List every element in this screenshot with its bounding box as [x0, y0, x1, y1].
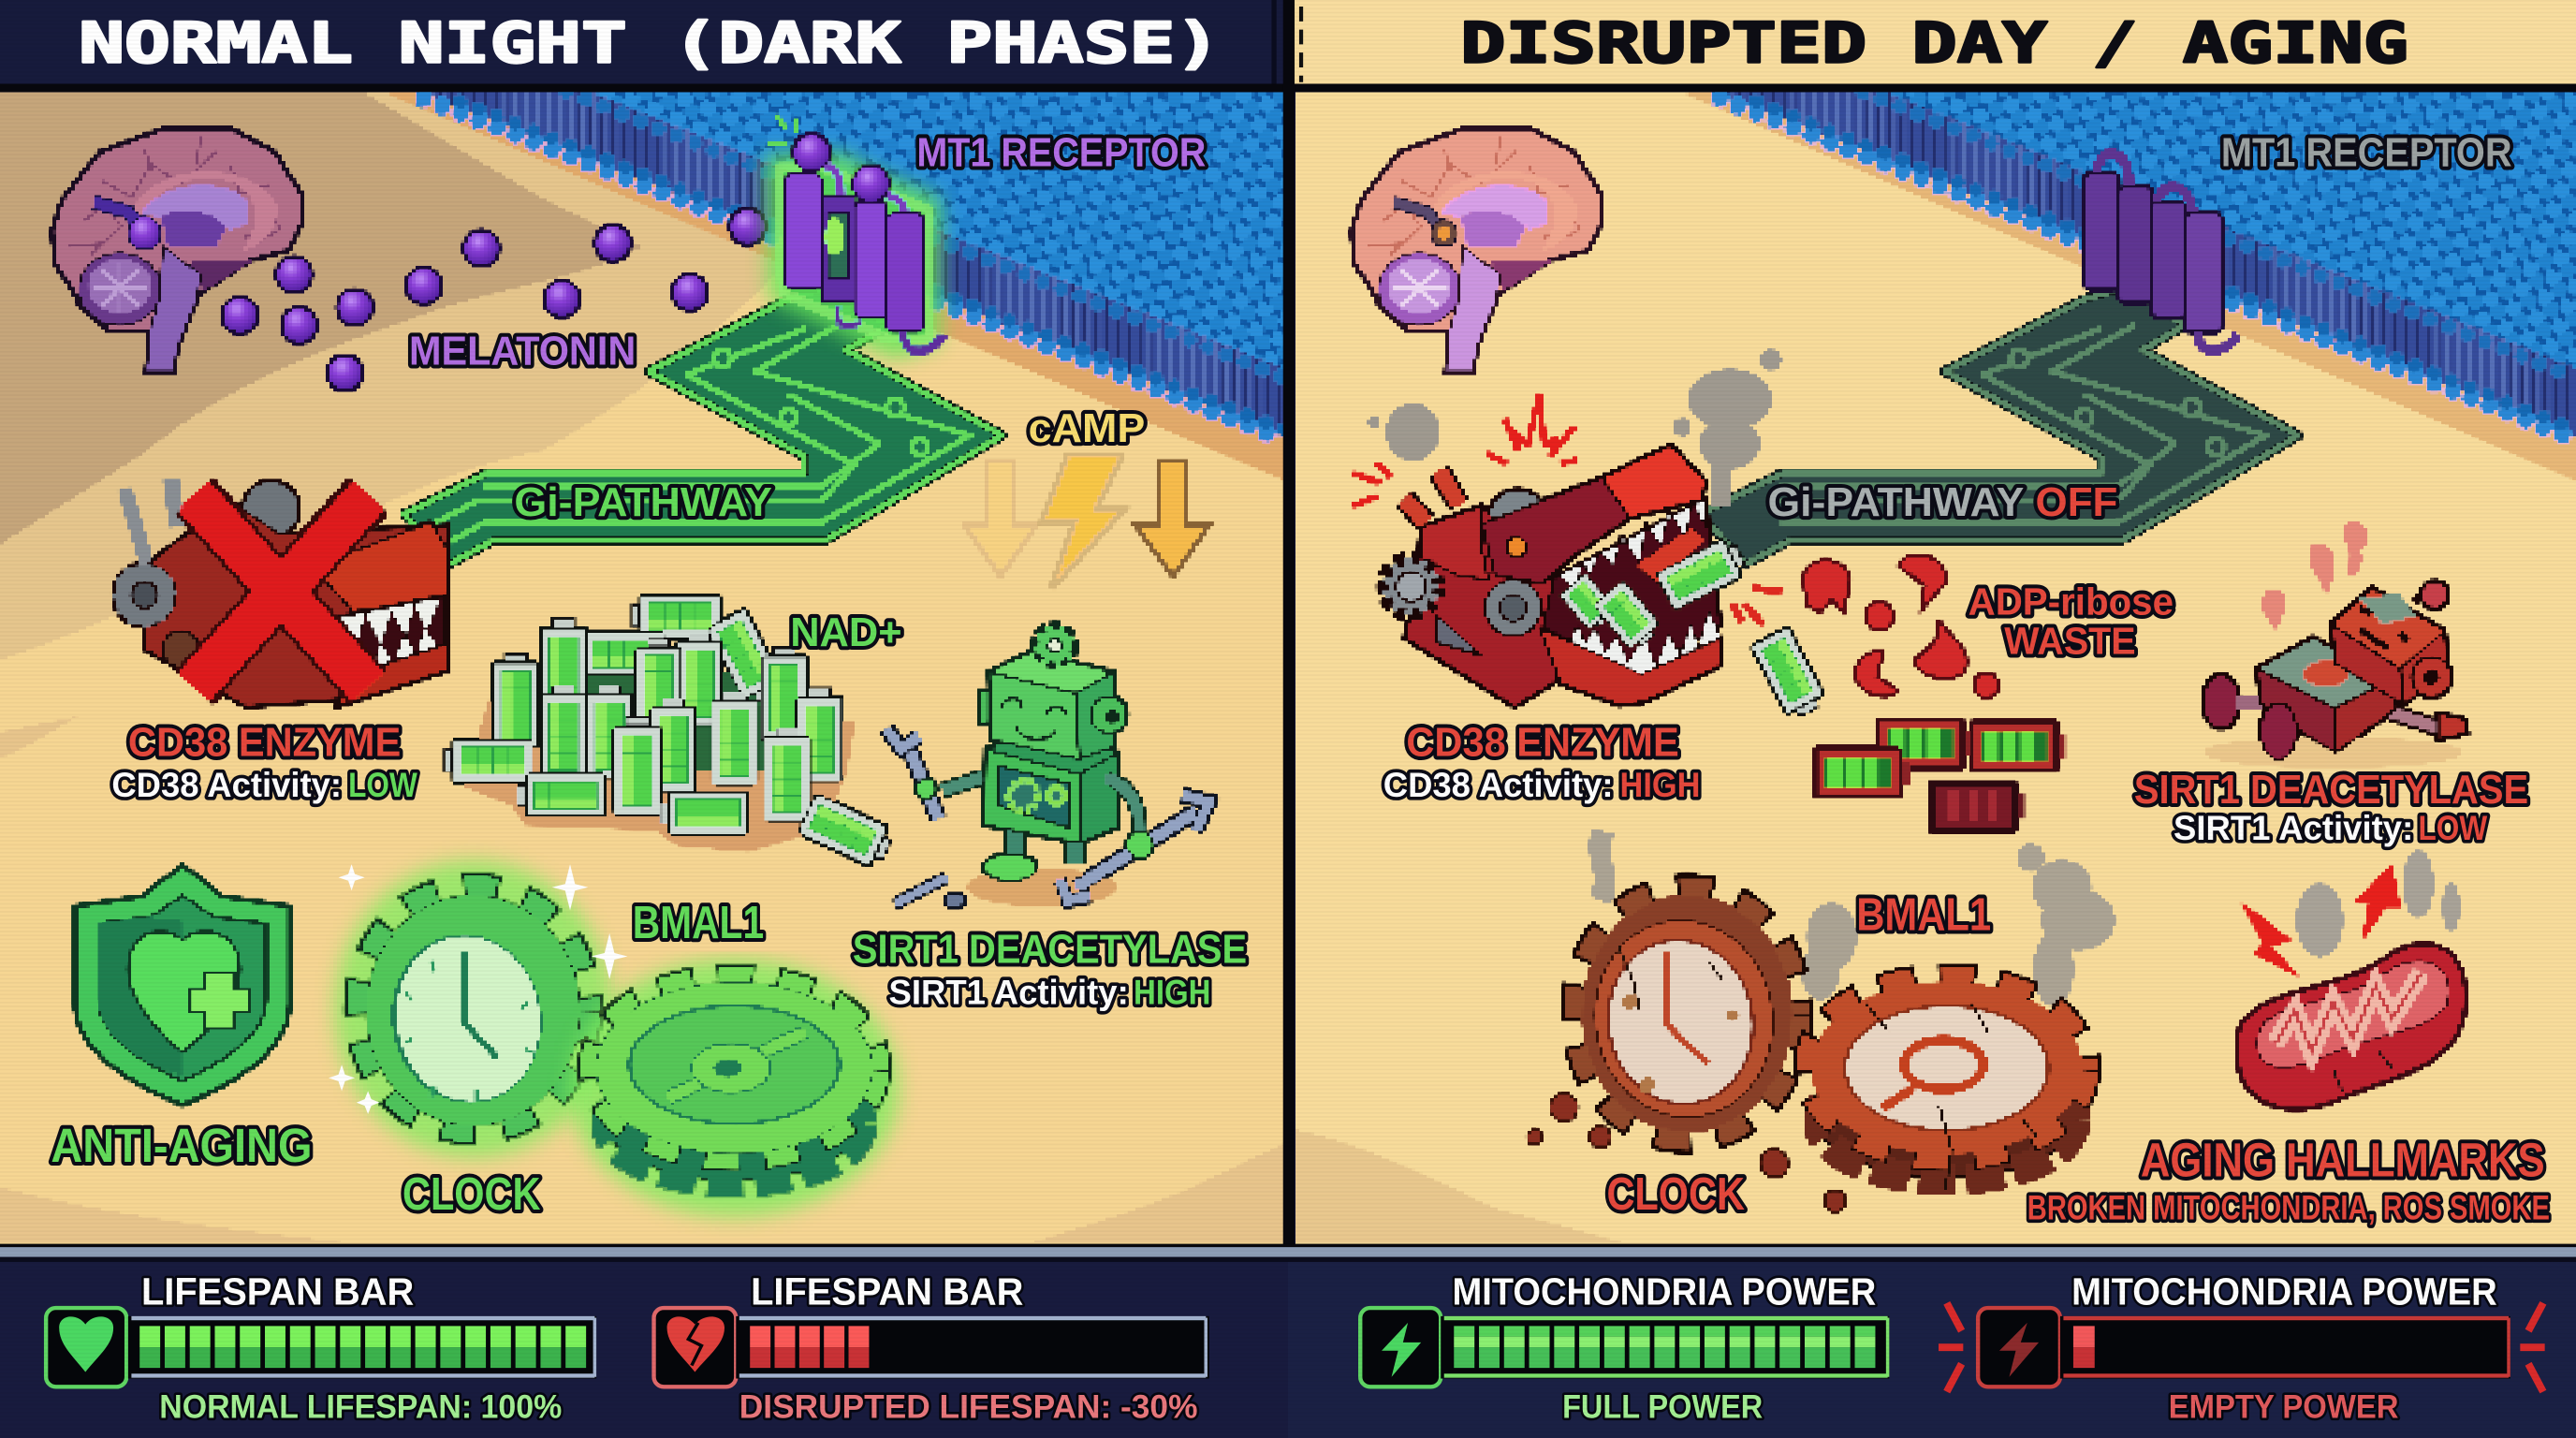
icon: ADP-ribose waste blobs — [1804, 555, 1998, 697]
membrane right — [1682, 92, 2576, 479]
label: ADP-ribose waste — [1969, 580, 2174, 663]
label: Gi-pathway: Gi-PATHWAY — [514, 479, 772, 525]
label: anti-aging: ANTI-AGING — [51, 1119, 312, 1172]
label: melatonin: MELATONIN — [409, 329, 636, 374]
icon: CD38 machine active — [1383, 446, 1749, 707]
icon: happy robot SIRT1 — [887, 626, 1209, 907]
icon: rusty BMAL1 gear — [1808, 979, 2085, 1191]
label: Gi-pathway off: OFF — [2036, 479, 2117, 525]
chart: Gi pathway circuit off — [1701, 287, 2298, 564]
label: SIRT1 activity low: LOW — [2419, 809, 2487, 847]
icon: NAD+ battery pile — [446, 594, 896, 871]
label: CD38 activity high: CD38 Activity: — [1383, 766, 1614, 804]
label: empty power: EMPTY POWER — [2169, 1389, 2398, 1426]
label: SIRT1 activity low: SIRT1 Activity: — [2174, 809, 2413, 847]
membrane left — [386, 92, 1284, 479]
label: CD38 enzyme: CD38 ENZYME — [128, 719, 401, 765]
label: NAD+: NAD+ — [790, 609, 902, 655]
title: disrupted day: DISRUPTED DAY / AGING — [1460, 12, 2408, 77]
icon: glowing clock gear — [335, 861, 611, 1157]
center divider — [1283, 0, 1295, 1249]
icon: red lightning bolts — [2241, 866, 2400, 976]
label: MT1 receptor: MT1 RECEPTOR — [916, 129, 1206, 175]
panel: disrupted day background — [1295, 92, 2576, 1245]
title: normal night: NORMAL NIGHT (DARK PHASE) — [79, 12, 1221, 77]
label: MT1 receptor grey: MT1 RECEPTOR — [2221, 129, 2512, 175]
left wrench and arm — [887, 729, 983, 818]
label: Gi-pathway off: Gi-PATHWAY — [1767, 479, 2024, 525]
icon: smoke over mitochondrion — [2297, 851, 2459, 956]
icon: rust debris — [1528, 1094, 1845, 1211]
icon: CD38 machine inhibited — [113, 479, 448, 707]
icon: rusty clock gear — [1579, 892, 1795, 1136]
label: BMAL1 normal: BMAL1 — [633, 898, 764, 948]
icon: sparkles — [329, 864, 627, 1114]
chart: empty power bar — [2060, 1316, 2510, 1379]
hammer — [896, 877, 964, 907]
right wrench — [1060, 795, 1209, 901]
label: ADP-ribose waste: ADP-ribose — [1969, 580, 2174, 623]
panel: normal night background — [0, 92, 1284, 1245]
icon: red X — [194, 496, 368, 687]
chart: disrupted lifespan bar 5 segments — [736, 1316, 1209, 1379]
panel: bottom status bar — [0, 1244, 2576, 1438]
label: CD38 enzyme high: CD38 ENZYME — [1406, 719, 1679, 765]
icon: cAMP down arrows and bolt — [966, 455, 1208, 588]
label: mitochondria power empty: MITOCHONDRIA POWER — [2071, 1270, 2497, 1313]
icon: depleted batteries — [1814, 718, 2065, 833]
icon: glowing BMAL1 gear — [570, 960, 899, 1216]
icon: MT1 receptor inactive — [2085, 154, 2237, 351]
label: SIRT1 activity high: HIGH — [1134, 973, 1211, 1011]
label: CD38 activity high: HIGH — [1620, 766, 1701, 804]
label: lifespan bar disrupted: LIFESPAN BAR — [751, 1270, 1023, 1313]
label: SIRT1 activity high: SIRT1 Activity: — [889, 973, 1129, 1011]
icon: gear smoke — [1589, 829, 2115, 1005]
icon: red bolt frame — [1978, 1308, 2060, 1387]
header: disrupted day — [1288, 0, 2576, 92]
icon: MT1 receptor active — [768, 115, 943, 351]
icon: brain disrupted — [1352, 130, 1602, 372]
icon: green heart frame — [46, 1308, 126, 1387]
icon: broken heart frame — [654, 1308, 736, 1387]
label: ADP-ribose waste: WASTE — [2004, 620, 2136, 663]
label: disrupted lifespan -30%: DISRUPTED LIFESPAN: -30% — [739, 1389, 1197, 1426]
chart: normal lifespan bar 18 segments — [128, 1316, 596, 1379]
label: cAMP: cAMP — [1029, 405, 1145, 451]
chart: full power bar — [1441, 1316, 1889, 1379]
label: BMAL1 disrupted: BMAL1 — [1856, 889, 1991, 940]
chart: Gi pathway circuit normal — [404, 287, 1003, 564]
icon: green bolt frame — [1360, 1308, 1441, 1387]
icon: red sparks — [1354, 396, 1577, 506]
icon: smoke over machine — [1368, 350, 1781, 506]
icon: warning rays — [1939, 1303, 2545, 1392]
melatonin molecules — [223, 210, 765, 390]
label: normal lifespan 100%: NORMAL LIFESPAN: 100% — [159, 1389, 562, 1426]
label: SIRT1 deacetylase high: SIRT1 DEACETYLASE — [853, 926, 1247, 972]
icon: broken rusty robot — [2203, 522, 2467, 768]
label: mitochondria power full: MITOCHONDRIA POWER — [1453, 1270, 1876, 1313]
label: SIRT1 deacetylase low: SIRT1 DEACETYLASE — [2134, 767, 2528, 813]
icon: brain normal — [52, 130, 302, 372]
header: normal night — [0, 0, 1288, 92]
label: full power: FULL POWER — [1562, 1389, 1763, 1426]
icon: falling battery — [1749, 625, 1828, 721]
label: CLOCK disrupted: CLOCK — [1606, 1169, 1745, 1220]
icon: anti-aging shield — [76, 866, 289, 1104]
label: CLOCK normal: CLOCK — [402, 1169, 541, 1220]
icon: spitting sparks — [1734, 588, 1781, 624]
label: CD38 activity low: CD38 Activity: — [111, 766, 342, 804]
label: CD38 activity low: LOW — [348, 766, 417, 804]
label: lifespan bar normal: LIFESPAN BAR — [141, 1270, 414, 1313]
icon: broken mitochondrion — [2237, 945, 2466, 1108]
